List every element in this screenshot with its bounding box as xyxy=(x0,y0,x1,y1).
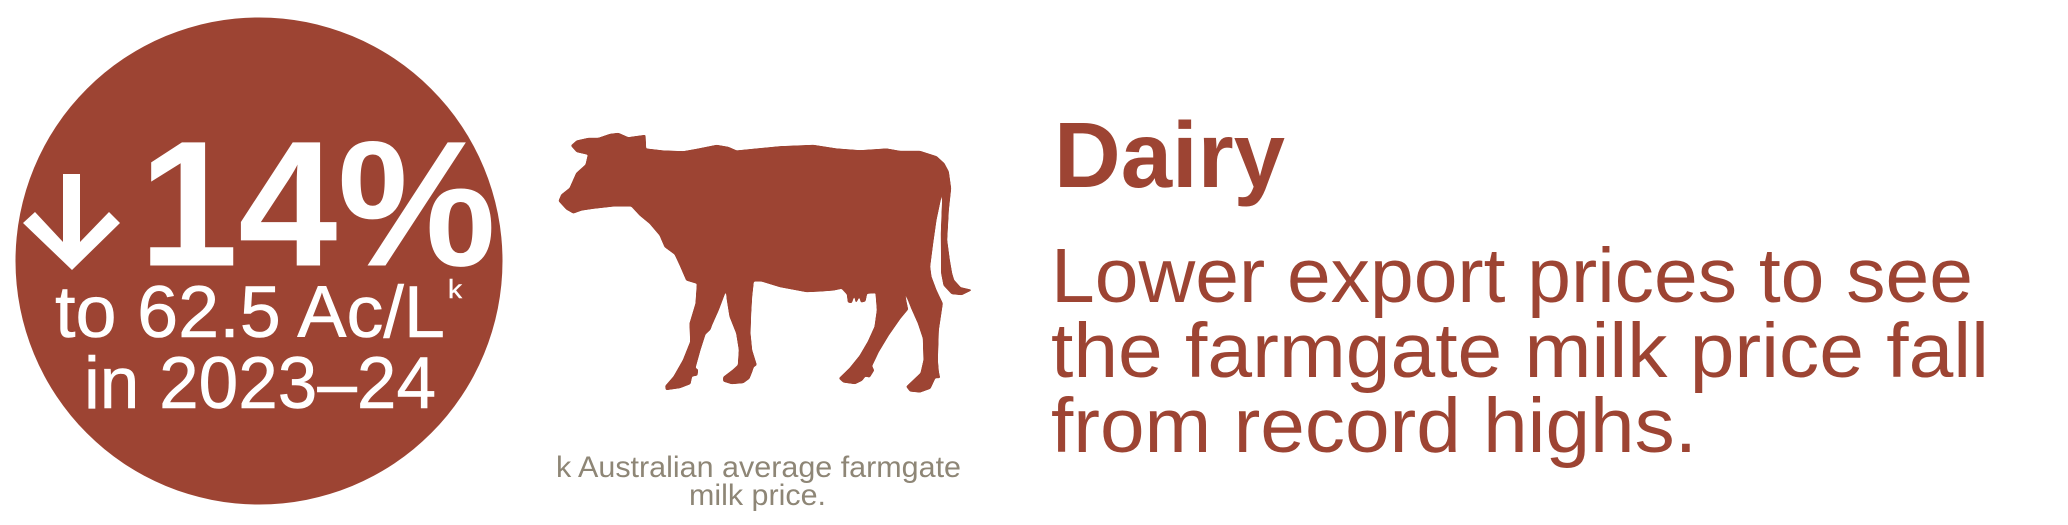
body text: from record highs. xyxy=(1051,383,1697,469)
year text: in 2023–24 xyxy=(84,343,436,424)
body text: Lower export prices to see xyxy=(1051,233,1973,319)
heading: Dairy: Dairy xyxy=(1054,103,1285,207)
body text: the farmgate milk price fall xyxy=(1051,308,1989,394)
price text: to 62.5 Ac/L xyxy=(55,272,445,353)
footnote xyxy=(556,451,961,512)
icon: cow silhouette xyxy=(559,133,972,392)
footnote: milk price. xyxy=(689,479,826,512)
circle background xyxy=(16,18,502,504)
icon: down arrow xyxy=(23,174,120,270)
footnote marker: k xyxy=(448,274,463,304)
body text xyxy=(1051,233,1989,469)
panel: price change circle xyxy=(16,18,502,504)
big figure: 14%: 14% xyxy=(139,104,496,304)
footnote: k Australian average farmgate xyxy=(556,451,961,484)
